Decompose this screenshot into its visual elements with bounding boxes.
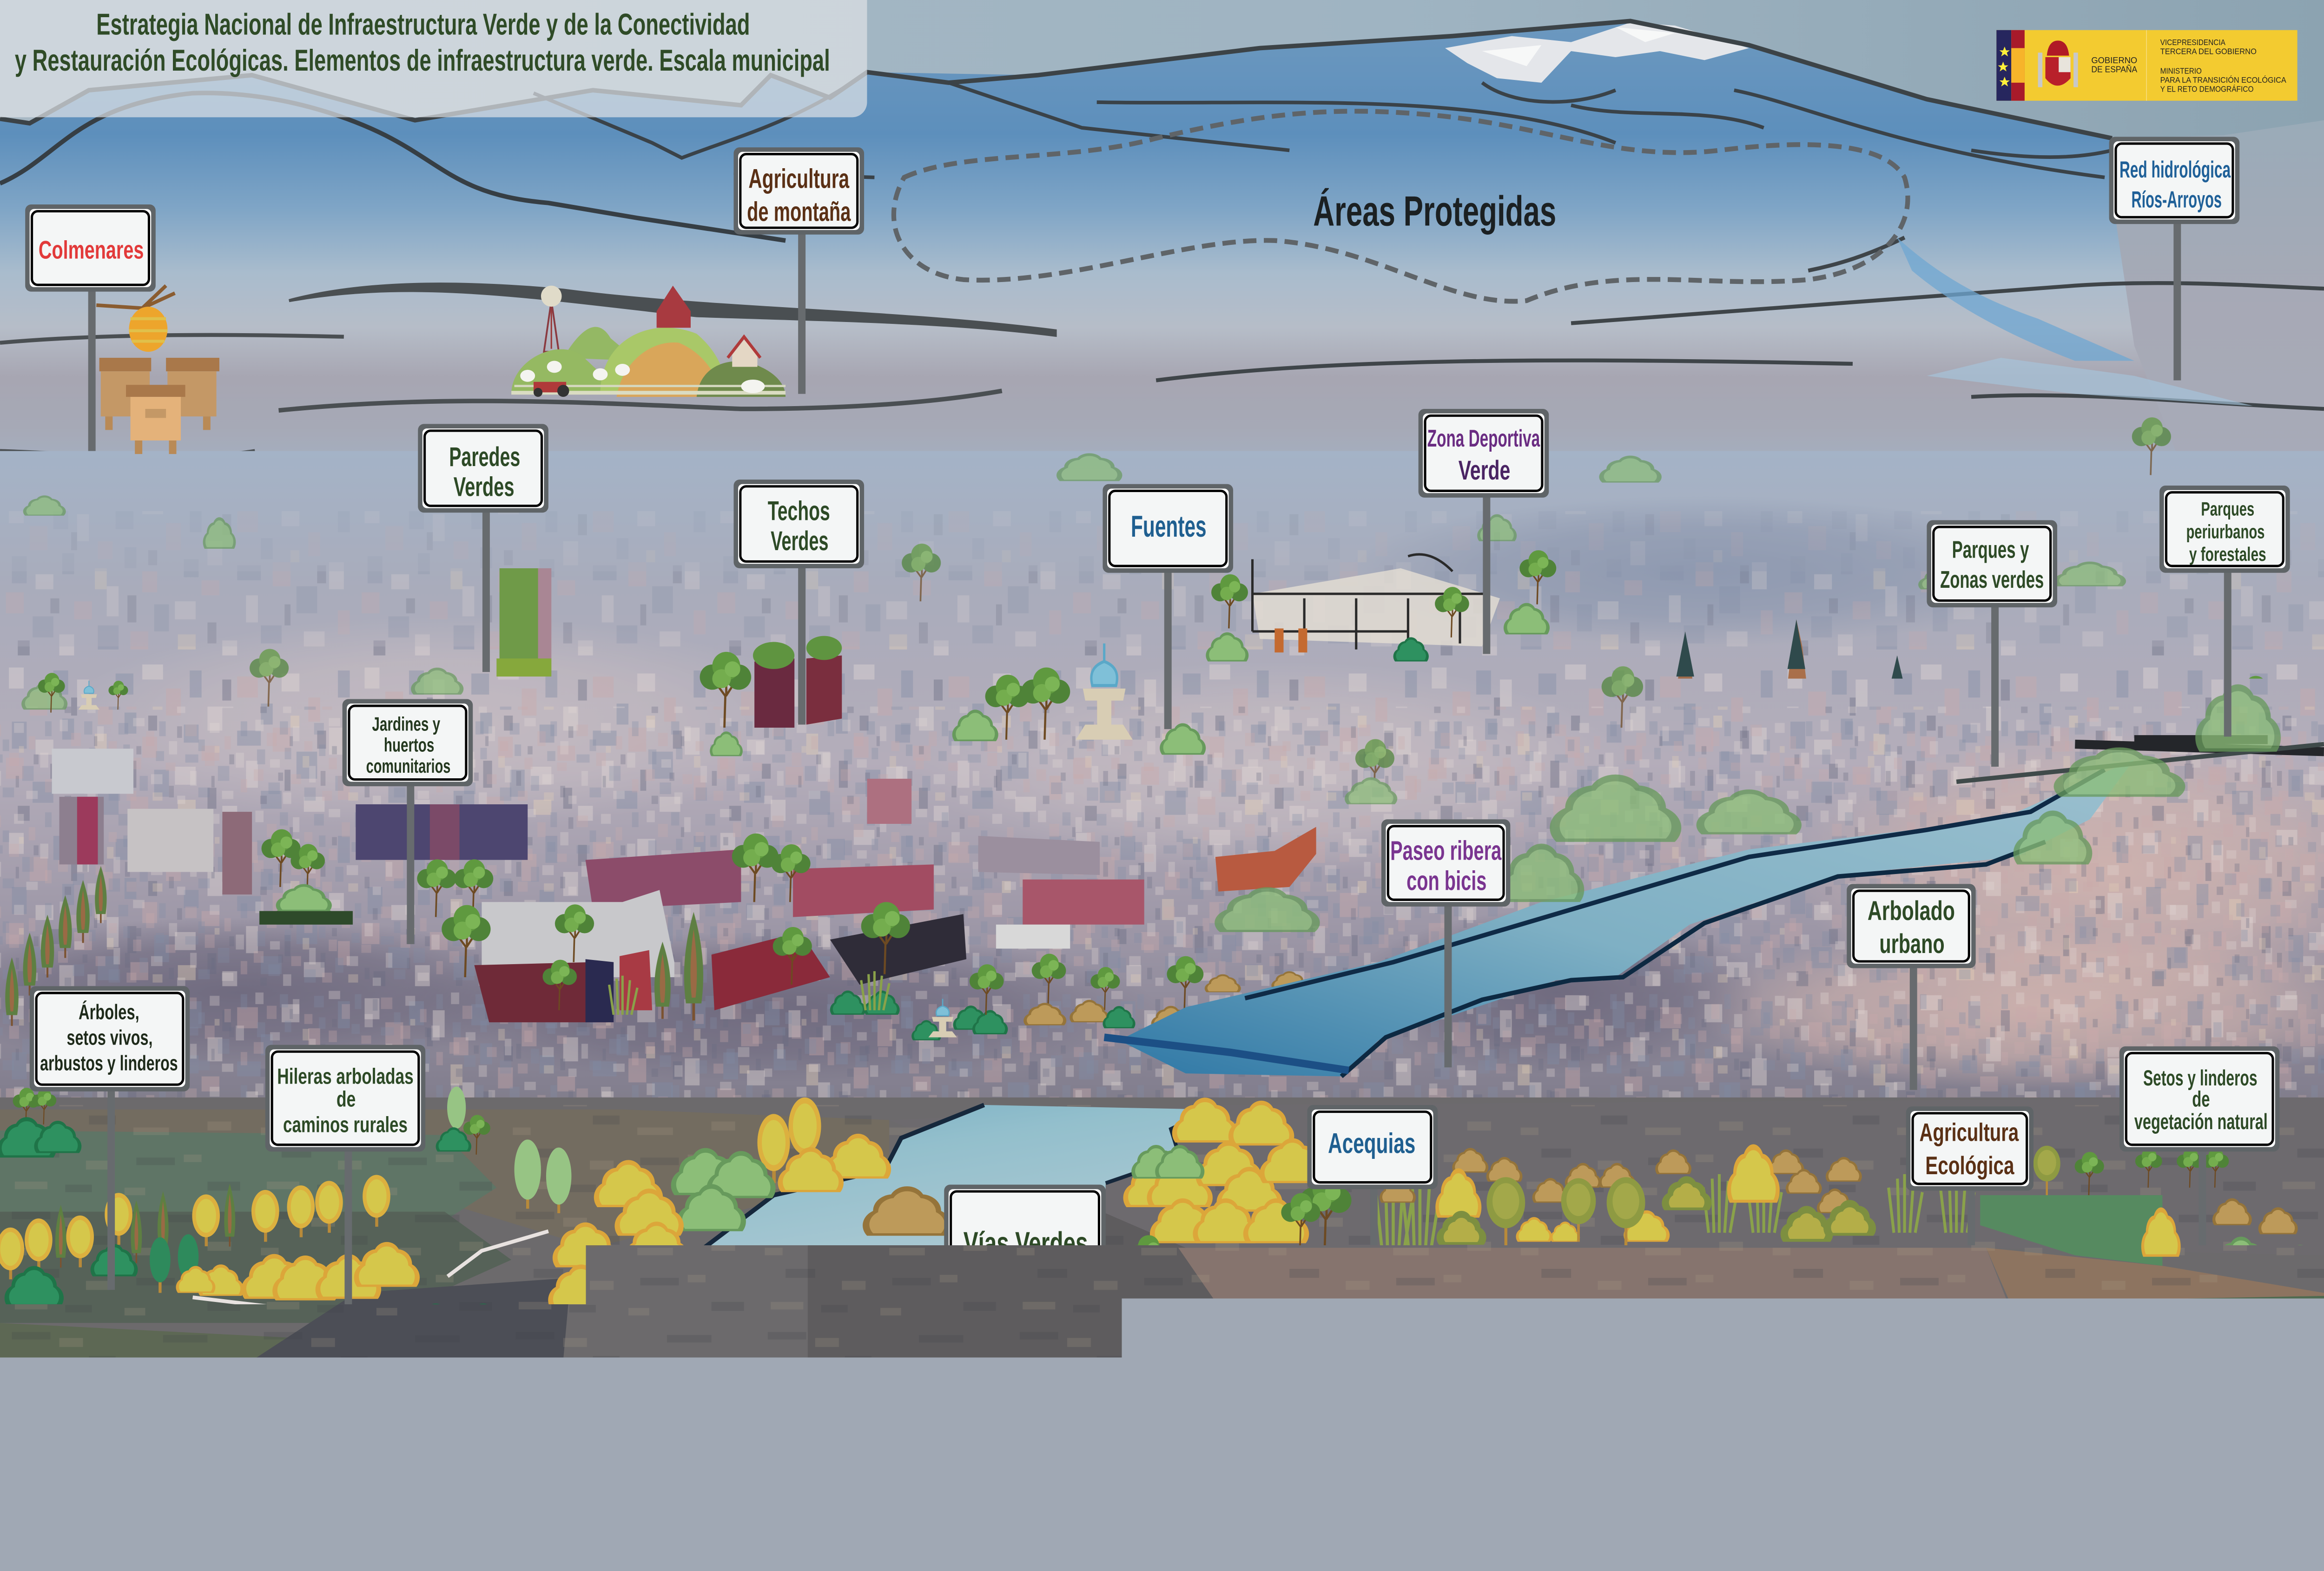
sign: Agricultura Ecológica: Agricultura — [1919, 1118, 2019, 1147]
farm clusters — [1274, 1436, 2119, 1543]
icon: beehive and hive boxes — [96, 286, 219, 454]
sign: Jardines y huertos comunitarios: huertos — [384, 734, 434, 756]
sign: Parques y Zonas verdes: Parques y — [1952, 536, 2029, 563]
logo: Gobierno de España: DE ESPAÑA — [2091, 64, 2137, 74]
sign: Techos Verdes: Verdes — [771, 526, 829, 556]
sign: Vías Verdes — [944, 1185, 1106, 1488]
sign: Parques periurbanos y forestales: Parques — [2201, 498, 2254, 520]
logo: Gobierno de España: GOBIERNO — [2091, 56, 2137, 65]
city buildings — [52, 749, 1316, 1022]
sign: Paseo ribera con bicis: con bicis — [1406, 866, 1486, 896]
sign: Arbolado urbano: Arbolado — [1868, 896, 1955, 926]
protected areas dashed boundary — [894, 111, 1908, 301]
logo: Gobierno de España — [1996, 30, 2298, 101]
sign: Agricultura de montaña: Agricultura — [748, 164, 850, 194]
sign: Jardines y huertos comunitarios: Jardines y — [372, 713, 440, 735]
sign: Parques y Zonas verdes: Zonas verdes — [1940, 566, 2044, 593]
lower Ebro river: Río Ebro — [630, 1278, 795, 1373]
sign: Fuentes — [1103, 484, 1233, 729]
sign: Hileras arboladas de caminos rurales — [265, 1045, 425, 1338]
icon: bee house — [1804, 1464, 1899, 1558]
logo: Gobierno de España: MINISTERIO — [2160, 66, 2202, 76]
community gardens — [78, 681, 353, 925]
tall reeds — [1980, 1195, 2162, 1266]
sign: Vías Verdes: Vías Verdes — [964, 1226, 1088, 1261]
sign: Zona Deportiva Verde: Zona Deportiva — [1427, 425, 1540, 452]
lower Ebro river — [205, 1105, 1211, 1564]
sign: Parques y Zonas verdes — [1927, 520, 2057, 767]
sign: Árboles, setos vivos, arbustos y linderos: arbustos y linderos — [40, 1051, 178, 1075]
sign: Hileras arboladas de caminos rurales: Hileras arboladas — [277, 1064, 414, 1089]
sign: Setos y linderos de vegetación natural: vegetación natural — [2134, 1109, 2268, 1134]
left field trees — [0, 1228, 24, 1279]
riverside woods — [1215, 676, 2281, 1071]
sign: Hileras arboladas de caminos rurales: caminos rurales — [283, 1112, 408, 1137]
sign: Árboles, setos vivos, arbustos y linderos: Árboles, — [79, 1000, 139, 1024]
city panorama — [0, 451, 2324, 1143]
sign: Árboles, setos vivos, arbustos y linderos — [30, 986, 190, 1290]
logo: Gobierno de España: Y EL RETO DEMOGRÁFICO — [2160, 84, 2254, 93]
fountain with park bench near cathedral — [1956, 730, 2072, 773]
lower landscape — [0, 1098, 2324, 1571]
title text — [15, 7, 830, 77]
green wall building — [496, 568, 551, 677]
bridges — [0, 824, 2324, 1131]
sign: Colmenares (hive): Colmenares — [39, 236, 144, 264]
olive hedges — [1470, 1388, 1509, 1415]
sign: Árboles, setos vivos, arbustos y linderos: setos vivos, — [66, 1025, 152, 1050]
sign: Arbolado urbano — [1847, 884, 1976, 1090]
sign: Charcas — [160, 1365, 286, 1564]
logo: Gobierno de España: TERCERA DEL GOBIERNO — [2160, 46, 2257, 56]
sign: Jardines y huertos comunitarios — [343, 699, 473, 944]
urban trees and fountain — [1589, 954, 2312, 1082]
sign: Parques periurbanos y forestales: y forestales — [2189, 543, 2266, 565]
title panel — [0, 0, 867, 117]
sign: Setos y linderos de vegetación natural: de — [2192, 1087, 2210, 1111]
sign: Colmenares (hive) — [25, 204, 156, 451]
sign: Agricultura de montaña — [733, 147, 864, 394]
sign: Agricultura Ecológica: Ecológica — [1925, 1151, 2014, 1180]
sign: Paredes Verdes — [418, 424, 548, 672]
sign: Arbolado urbano: urbano — [1879, 929, 1945, 959]
sign: Paredes Verdes: Paredes — [449, 442, 520, 472]
green roof towers — [753, 636, 842, 728]
park trees and fountains — [5, 644, 1307, 1040]
sign: Red hidrológica: Red hidrológica — [2119, 156, 2231, 183]
Basilica del Pilar — [1657, 619, 1912, 797]
sign: Colmenares (fields) — [1728, 1281, 1855, 1526]
streams — [193, 1231, 548, 1375]
title text: y Restauración Ecológicas. Elementos de infraestructura verde. Escala municipal — [15, 44, 830, 77]
sign: Agricultura de montaña: de montaña — [747, 197, 851, 227]
logo: Gobierno de España: VICEPRESIDENCIA — [2160, 38, 2225, 47]
sign: Acequias: Acequias — [1328, 1127, 1415, 1159]
sign: Jardines y huertos comunitarios: comunitarios — [366, 755, 450, 777]
riverside shrubs and yellow poplars — [0, 1087, 2324, 1571]
sign: Paredes Verdes: Verdes — [454, 472, 515, 502]
sign: Zona Deportiva Verde — [1419, 409, 1549, 654]
sign: Setos y linderos de vegetación natural: Setos y linderos — [2143, 1066, 2258, 1090]
sign: Paseo ribera con bicis: Paseo ribera — [1390, 836, 1502, 866]
sign: Fuentes: Fuentes — [1131, 510, 1207, 543]
upper river Ebro through the city — [1104, 740, 2324, 1077]
sign: Acequias — [1307, 1105, 1438, 1301]
background: sky and mountains — [0, 0, 2324, 496]
distant green tree patches — [21, 417, 2171, 804]
coat of arms — [2038, 40, 2078, 87]
protected areas label: Áreas Protegidas — [1313, 188, 1556, 235]
sign: Hileras arboladas de caminos rurales: de — [337, 1087, 356, 1111]
sign: Red hidrológica — [2109, 137, 2239, 381]
sign: Paseo ribera con bicis — [1381, 819, 1510, 1067]
logo: Gobierno de España: PARA LA TRANSICIÓN ECOLÓGICA — [2160, 75, 2286, 85]
sign: Agricultura Ecológica — [1906, 1106, 2034, 1346]
sign: Red hidrológica: Ríos-Arroyos — [2131, 186, 2222, 213]
sign: Charcas: Charcas — [184, 1389, 267, 1423]
sign: Setos y linderos de vegetación natural — [2119, 1046, 2279, 1346]
sign: Techos Verdes: Techos — [768, 496, 830, 526]
sign: Zona Deportiva Verde: Verde — [1459, 456, 1510, 486]
outdoor gym — [1206, 550, 1556, 662]
sign: Colmenares (fields): Colmenares — [1738, 1309, 1845, 1338]
sign: Parques periurbanos y forestales: periurbanos — [2186, 520, 2265, 542]
title text: Estrategia Nacional de Infraestructura Verde y de la Conectividad — [96, 7, 750, 41]
sign: Techos Verdes — [733, 480, 864, 724]
cyclists on riverside path — [1430, 964, 1576, 1077]
icon: mountain farm — [511, 286, 786, 397]
sign: Parques periurbanos y forestales — [2159, 486, 2290, 736]
